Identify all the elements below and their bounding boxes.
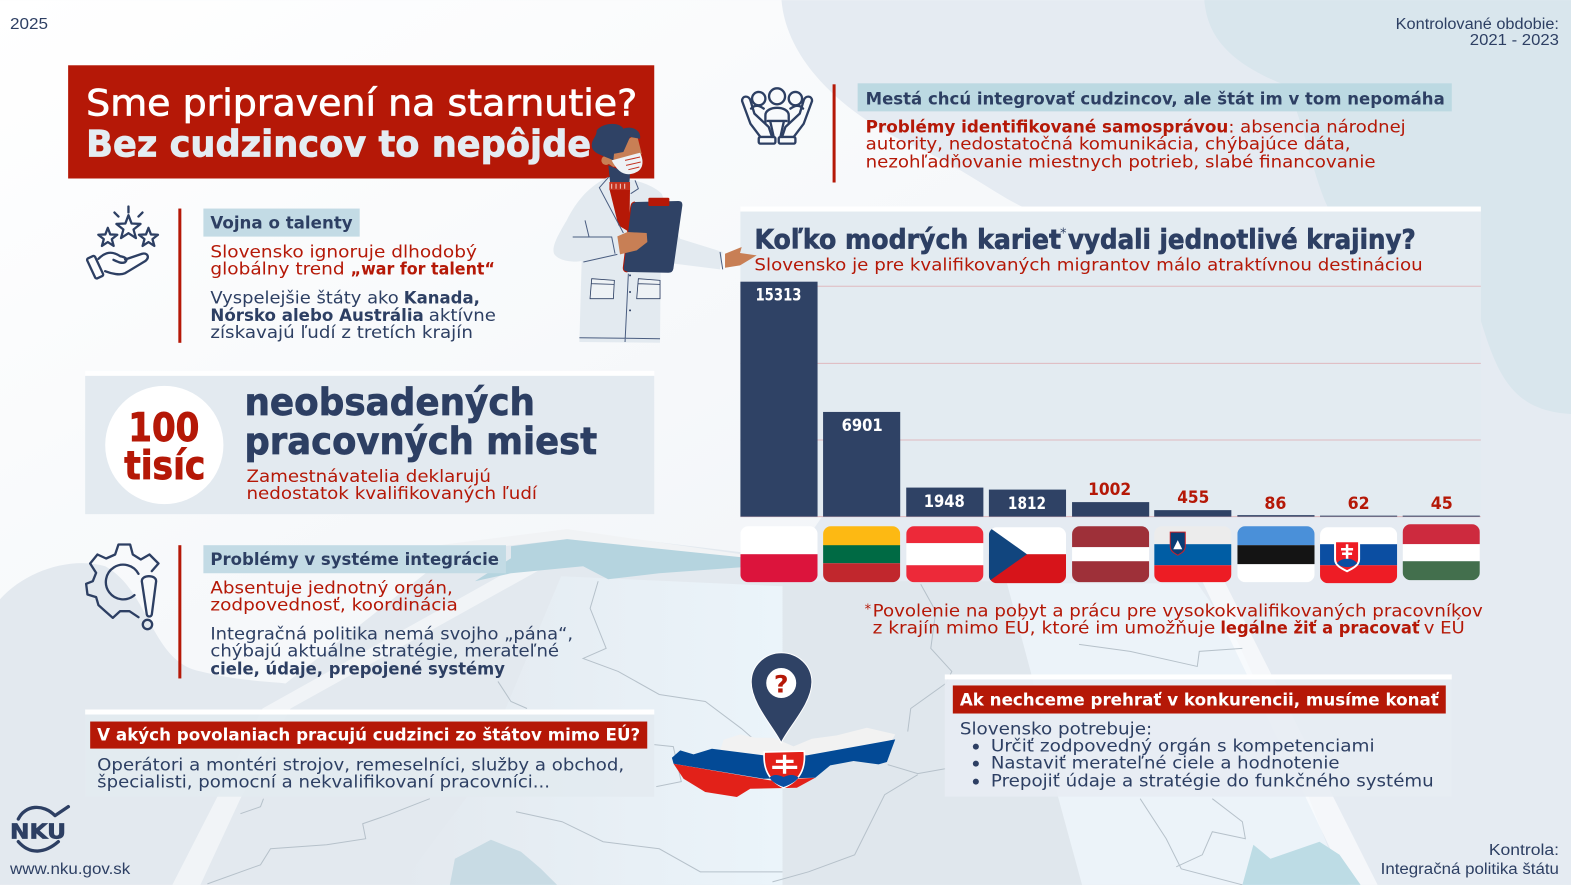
footnote: legálne žiť a pracovať bbox=[1220, 618, 1421, 637]
block: integration system problems: zodpovednosť, koordinácia bbox=[210, 595, 458, 614]
panel: occupations of third-country foreigners: Operátori a montéri strojov, remeselníci, služby a obchod, bbox=[97, 756, 624, 775]
audited period: Kontrolované obdobie: bbox=[1396, 16, 1559, 33]
block: war for talent: Vyspelejšie štáty ako bbox=[210, 289, 399, 308]
divider line bbox=[833, 84, 836, 183]
block: war for talent: aktívne bbox=[429, 306, 496, 325]
block: cities want to integrate foreigners bbox=[858, 83, 1452, 171]
website: www.nku.gov.sk bbox=[9, 861, 131, 878]
chart heading: * bbox=[1060, 227, 1067, 242]
block: integration system problems bbox=[203, 545, 573, 678]
heading: Vojna o talenty bbox=[210, 214, 353, 233]
flag: Lithuania bbox=[823, 526, 900, 582]
flag: Slovenia bbox=[1154, 526, 1231, 582]
panel: what Slovakia needs: Určiť zodpovedný orgán s kompetenciami bbox=[991, 737, 1375, 756]
bar chart: 455 bbox=[1177, 488, 1209, 507]
audit name bbox=[1381, 842, 1559, 878]
chart heading: Koľko modrých kariet bbox=[754, 225, 1061, 256]
panel: 100 thousand vacancies: nedostatok kvalifikovaných ľudí bbox=[246, 484, 539, 503]
bar chart: 86 bbox=[1264, 494, 1286, 513]
footnote: z krajín mimo EÚ, ktoré im umožňuje bbox=[873, 618, 1215, 637]
illustration: doctor with clipboard bbox=[553, 124, 757, 343]
audit name: Integračná politika štátu bbox=[1381, 861, 1559, 878]
bar chart: 1812 bbox=[1008, 494, 1046, 513]
panel: occupations of third-country foreigners bbox=[85, 710, 654, 797]
illustration: Slovakia in flag colours with location pin: ? bbox=[774, 671, 789, 699]
heading: Mestá chcú integrovať cudzincov, ale štát im v tom nepomáha bbox=[866, 89, 1445, 108]
divider line bbox=[178, 209, 181, 343]
panel: occupations of third-country foreigners: špecialisti, pomocní a nekvalifikovaní pracovníci... bbox=[97, 773, 550, 792]
flag: Poland bbox=[740, 526, 818, 582]
audited period: 2021 - 2023 bbox=[1470, 32, 1559, 49]
bar chart: 15313 bbox=[755, 286, 802, 305]
bar chart: 45 bbox=[1431, 494, 1453, 513]
block: cities want to integrate foreigners: nezohľadňovanie miestnych potrieb, slabé financovanie bbox=[866, 152, 1376, 171]
block: integration system problems: chýbajú aktuálne stratégie, merateľné bbox=[210, 641, 559, 660]
block: cities want to integrate foreigners: Problémy identifikované samosprávou bbox=[866, 117, 1228, 136]
bar chart: 1002 bbox=[1088, 480, 1131, 499]
white circle with number bbox=[105, 386, 223, 504]
block: cities want to integrate foreigners: autority, nedostatočná komunikácia, chýbajúce dáta, bbox=[866, 134, 1351, 153]
audit name: Kontrola: bbox=[1489, 842, 1559, 859]
title banner: Sme pripravení na starnutie? bbox=[86, 82, 637, 124]
title banner: Bez cudzincov to nepôjde bbox=[86, 123, 591, 165]
panel: what Slovakia needs: Ak nechceme prehrať v konkurencii, musíme konať bbox=[960, 691, 1440, 710]
panel: 100 thousand vacancies bbox=[85, 371, 654, 514]
year: 2025 bbox=[10, 16, 48, 33]
block: integration system problems: Absentuje jednotný orgán, bbox=[210, 578, 453, 597]
bar chart: 1948 bbox=[924, 492, 965, 511]
bar chart bbox=[740, 282, 1480, 517]
block: cities want to integrate foreigners: : absencia národnej bbox=[1228, 117, 1406, 136]
block: war for talent: Slovensko ignoruje dlhodobý bbox=[210, 243, 477, 262]
panel: 100 thousand vacancies: pracovných miest bbox=[244, 420, 597, 463]
white circle with number: tisíc bbox=[124, 444, 205, 489]
title banner bbox=[68, 65, 654, 178]
block: war for talent: globálny trend bbox=[210, 260, 345, 279]
flag: Latvia bbox=[1072, 526, 1149, 582]
chart heading: vydali jednotlivé krajiny? bbox=[1068, 225, 1416, 256]
block: integration system problems: ciele, údaje, prepojené systémy bbox=[210, 659, 505, 678]
panel: occupations of third-country foreigners: V akých povolaniach pracujú cudzinci zo štátov mimo EÚ? bbox=[97, 726, 640, 745]
sea: Adriatic bbox=[450, 840, 557, 885]
panel: what Slovakia needs bbox=[945, 674, 1452, 797]
panel: what Slovakia needs: Slovensko potrebuje: bbox=[960, 720, 1152, 739]
logo: NKU bbox=[10, 807, 68, 851]
bar chart: 6901 bbox=[842, 416, 883, 435]
sea: Black Sea bbox=[1242, 842, 1361, 885]
panel: what Slovakia needs: Nastaviť merateľné ciele a hodnotenie bbox=[991, 754, 1340, 773]
footnote: v EÚ bbox=[1424, 618, 1465, 637]
bar chart: 62 bbox=[1348, 494, 1370, 513]
icon: hands holding people bbox=[742, 88, 812, 144]
audited period bbox=[1396, 16, 1559, 49]
flag: Hungary bbox=[1403, 524, 1480, 580]
white circle with number: 100 bbox=[128, 406, 199, 451]
chart subtitle: Slovensko je pre kvalifikovaných migrantov málo atraktívnou destináciou bbox=[754, 256, 1423, 275]
heading bbox=[203, 545, 506, 573]
logo: NKU: NKU bbox=[10, 819, 66, 843]
flag: Slovakia bbox=[1320, 527, 1397, 583]
block: war for talent: „war for talent“ bbox=[351, 260, 495, 279]
divider line bbox=[178, 545, 181, 678]
block: war for talent bbox=[203, 209, 496, 342]
heading bbox=[858, 83, 1452, 111]
chart heading bbox=[754, 225, 1416, 256]
flag: Estonia bbox=[1237, 526, 1315, 582]
panel: 100 thousand vacancies: neobsadených bbox=[244, 381, 535, 424]
panel: 100 thousand vacancies: Zamestnávatelia deklarujú bbox=[246, 467, 491, 486]
icon: gear with exclamation mark bbox=[86, 545, 158, 629]
sea: Baltic bbox=[475, 539, 741, 581]
block: war for talent: získavajú ľudí z tretích krajín bbox=[210, 323, 473, 342]
heading: Problémy v systéme integrácie bbox=[210, 550, 499, 569]
panel: what Slovakia needs: Prepojiť údaje a stratégie do funkčného systému bbox=[991, 772, 1434, 791]
panel: blue cards chart bbox=[740, 207, 1481, 517]
footnote: * bbox=[865, 602, 872, 617]
block: war for talent: Kanada, bbox=[404, 289, 480, 308]
block: war for talent: Nórsko alebo Austrália bbox=[210, 306, 424, 325]
illustration: Slovakia in flag colours with location pin bbox=[672, 653, 895, 797]
flag: Czechia bbox=[989, 527, 1066, 583]
footnote: Povolenie na pobyt a prácu pre vysokokvalifikovaných pracovníkov bbox=[873, 601, 1483, 620]
block: integration system problems: Integračná politika nemá svojho „pána“, bbox=[210, 624, 573, 643]
heading bbox=[203, 209, 360, 237]
icon: hand with stars bbox=[87, 207, 158, 279]
footnote bbox=[865, 601, 1483, 637]
flag: Austria bbox=[906, 526, 983, 582]
